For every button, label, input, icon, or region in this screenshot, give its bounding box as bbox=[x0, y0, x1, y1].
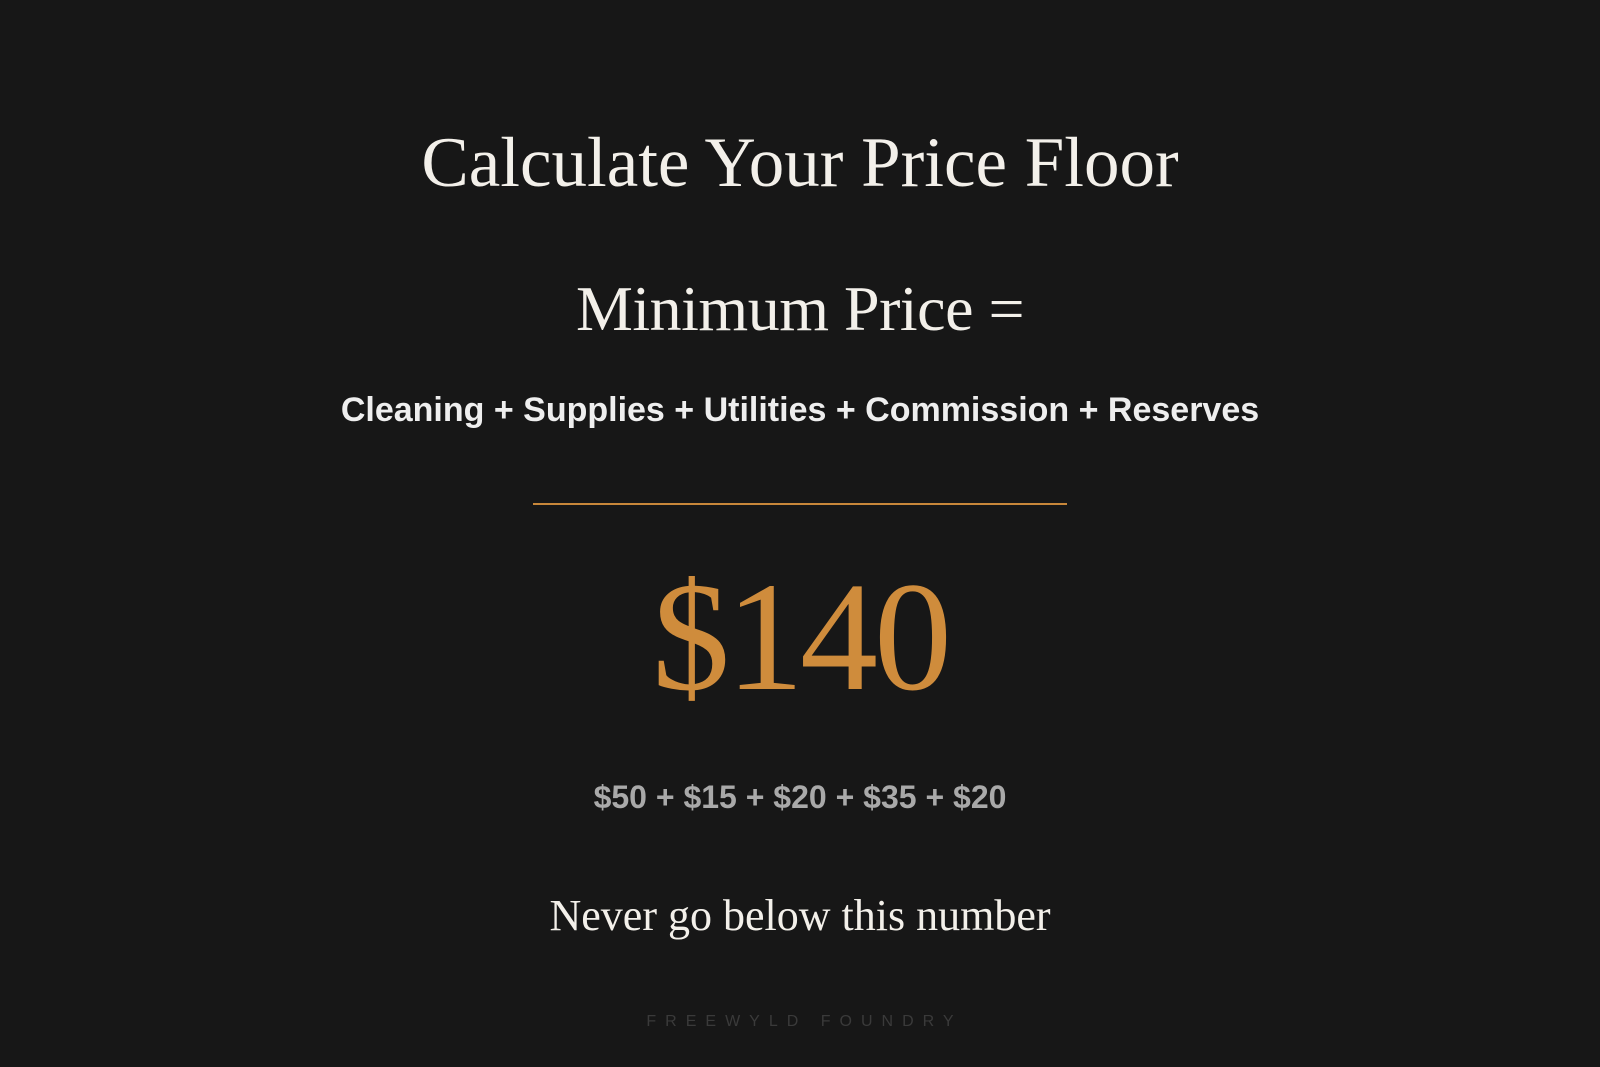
tagline: Never go below this number bbox=[550, 891, 1050, 940]
formula heading: Minimum Price = bbox=[576, 273, 1024, 344]
footer brand: FREEWYLD FOUNDRY bbox=[646, 1013, 963, 1030]
component values: $50 + $15 + $20 + $35 + $20 bbox=[594, 779, 1006, 815]
result number: $140 bbox=[652, 550, 948, 723]
gold divider bbox=[533, 503, 1067, 505]
formula components: Cleaning + Supplies + Utilities + Commission + Reserves bbox=[341, 391, 1259, 429]
title: Calculate Your Price Floor bbox=[421, 124, 1179, 202]
